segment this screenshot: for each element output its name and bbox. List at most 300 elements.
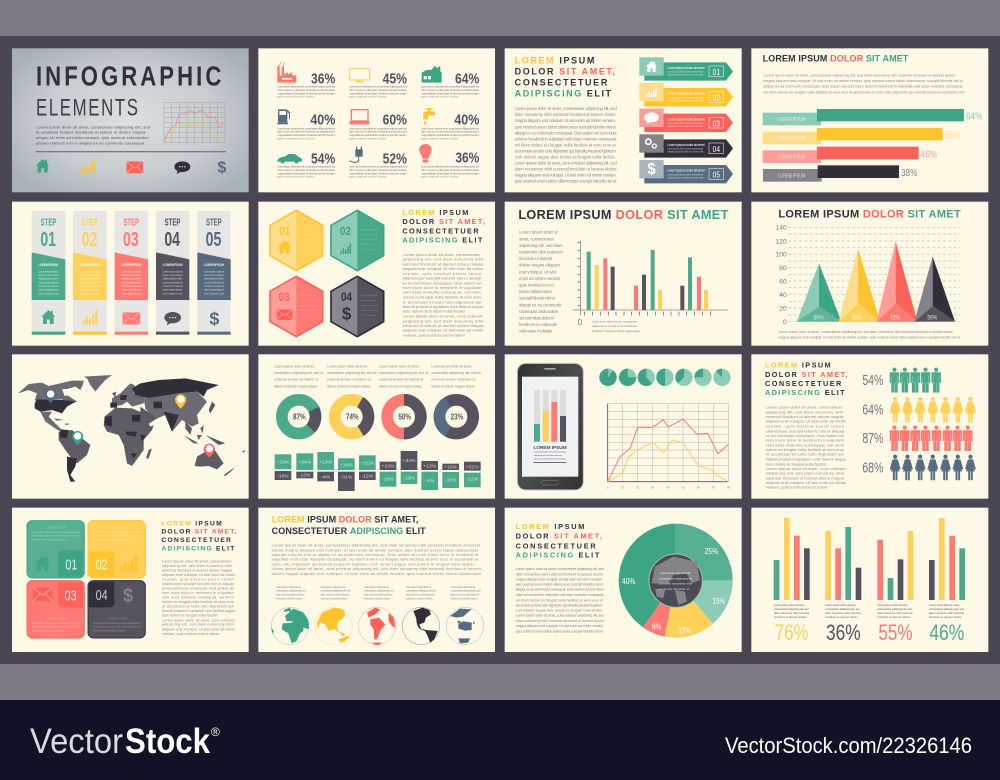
bar 55% xyxy=(763,128,961,144)
image id: VectorStock.com/22326146 xyxy=(725,733,972,758)
hexagon captions: adipiscing elit sed xyxy=(361,304,378,307)
body text: Lorem ipsum dolor sit amet, consectetuer xyxy=(766,405,843,410)
hexagon captions: nibh euismod xyxy=(361,315,378,317)
captions: Lorem ipsum dolor sit amet, consectetuer adipiscing elit, sed xyxy=(349,165,407,169)
column text: Lorem ipsum dolor sit amet, xyxy=(327,364,368,368)
tile 04: 04 xyxy=(96,588,108,604)
icon: bars xyxy=(81,159,95,173)
heading: CONSECTETUER xyxy=(161,537,231,544)
hexagon 04 xyxy=(331,276,384,337)
body text: ex ea commodo consequat. Duis autem vel xyxy=(162,587,234,591)
step 04: nonummy nibh euismod xyxy=(163,280,183,284)
icon: home xyxy=(36,159,49,172)
panel: phone and line chart xyxy=(505,354,742,499)
tile 04: laoreet dolore magna aliquam xyxy=(93,629,126,632)
heading xyxy=(516,522,602,560)
column text: consectetur adipiscing elit, sed do xyxy=(379,371,429,375)
globe captions: diam nonummy nibh euismod xyxy=(406,594,435,597)
percent 54: 54% xyxy=(311,151,335,167)
segment labels: 8% xyxy=(652,621,662,631)
centre globe: sed diam nonummy nibh xyxy=(659,582,693,586)
group 36%: consectetuer adipiscing elit, sed xyxy=(825,608,860,611)
centre globe: Lorem ipsum dolor sit amet xyxy=(660,571,691,575)
body text: veniam, quis nostrud exerci tation xyxy=(766,485,827,490)
panel: ring chart xyxy=(505,508,742,652)
hexagon 02 xyxy=(331,210,384,271)
centre globe: consectetuer adipiscing elit xyxy=(659,576,692,580)
group 36%: Lorem ipsum dolor sit amet, xyxy=(825,604,856,607)
step 04: tincidunt ut laoreet xyxy=(163,284,183,288)
step 05: nonummy nibh euismod xyxy=(204,280,225,284)
step 05: adipiscing elit sed diam xyxy=(204,277,225,281)
captions: Lorem ipsum dolor sit amet, consectetuer adipiscing elit, sed xyxy=(277,126,336,130)
icon: dollar: $ xyxy=(217,160,227,177)
step 01: 01 xyxy=(40,229,56,251)
body text: Lorem ipsum dolor sit amet, consectetuer adipiscing elit, sed diam nonummy nibh euismod tincidunt ut laoreet xyxy=(272,544,481,548)
side text: adipiscing elit, sed diam xyxy=(519,243,563,248)
captions: quis nostrud exerci tation xyxy=(277,136,315,140)
body text: aliquam erat volutpat. Ut wisi enim ad minim xyxy=(162,573,235,577)
logo: VectorStock: ® xyxy=(211,725,220,739)
heading: CONSECTETUER xyxy=(515,77,608,87)
captions: magna aliquam erat volutpat. Ut wisi enim ad minim veniam xyxy=(277,171,336,175)
body text: Lorem ipsum dolor sit amet, cons ectetuer adipiscing elit, sed xyxy=(515,161,617,166)
donut 87% xyxy=(276,394,321,439)
hexagon captions: sit amet consect xyxy=(300,299,317,302)
heading: ADIPISCING ELIT xyxy=(765,388,845,397)
step 05: amet consectetuer xyxy=(204,273,224,277)
donut 50% xyxy=(387,400,421,433)
body text: Lorem ipsum dolor sit amet, cons ectetuer adipiscing elit, sed xyxy=(516,614,604,618)
body text: euismod tincidunt ut laoreet dolore magna xyxy=(403,261,484,266)
bar 64%: LOREM IPSUM xyxy=(778,117,805,123)
body text: aliquip ex ea commodo consequat. Duis autem vel eum iriure dolor in hendrerit in vulputate velit esse molestie consequat, xyxy=(763,85,963,89)
percent 52: 52% xyxy=(383,151,407,167)
tile 03: 03 xyxy=(65,589,77,605)
globe red xyxy=(358,607,396,645)
column text: Lorem ipsum dolor sit amet, xyxy=(431,364,472,368)
step 05: dolore magna aliquam xyxy=(204,288,225,292)
percent labels xyxy=(862,373,883,476)
step 01: Lorem ipsum dolor sit xyxy=(38,269,59,273)
captions: magna aliquam erat volutpat. Ut wisi enim ad minim veniam xyxy=(349,133,407,137)
arrow 04 xyxy=(639,134,733,158)
arrow 02: adipiscing elit sed diam nonummy nibh xyxy=(667,99,704,102)
bar values: +34% xyxy=(403,458,416,464)
heading: DOLOR SIT AMET, xyxy=(515,66,615,76)
bar values: +31% xyxy=(466,464,479,470)
icon: envelope xyxy=(126,161,143,173)
captions: magna aliquam erat volutpat. Ut wisi enim ad minim veniam xyxy=(421,133,480,137)
globe captions: diam nonummy nibh euismod xyxy=(276,594,305,597)
logo: VectorStock: Vector xyxy=(30,722,123,761)
hexagon captions: Lorem ipsum dolor xyxy=(361,228,378,231)
centre globe: euismod tincidunt ut xyxy=(659,587,690,591)
y axis labels: 120 xyxy=(776,238,787,245)
green row xyxy=(890,367,941,393)
step 02: tincidunt ut laoreet xyxy=(80,284,100,288)
donut 87%: 87% xyxy=(293,412,306,421)
map xyxy=(18,375,245,482)
hexagon captions: Lorem ipsum dolor xyxy=(361,294,378,297)
globe captions: diam nonummy nibh euismod xyxy=(321,594,350,597)
column text: Lorem ipsum dolor sit amet, xyxy=(379,364,420,368)
captions: Lorem ipsum dolor sit amet, consectetuer adipiscing elit, sed xyxy=(349,126,407,130)
captions: magna aliquam erat volutpat. Ut wisi enim ad minim veniam xyxy=(349,171,407,175)
footer band xyxy=(0,700,1000,780)
chart axis labels: 80 xyxy=(727,485,731,489)
globe captions: tincidunt ut laoreet dolore xyxy=(276,597,303,600)
percent labels: 54% xyxy=(862,373,883,389)
tile 04: $ xyxy=(123,586,133,607)
arrow 03: Lorem ipsum dolor sit amet consectetuer xyxy=(667,122,704,125)
body text: dolore eu feugiat nulla facilisis at vero eros xyxy=(766,447,844,452)
arrow 05: $ xyxy=(647,161,656,178)
column text: eiusmod tempor incididunt ut xyxy=(379,378,423,382)
side text: velit esse molestie xyxy=(519,329,553,334)
panel: people pictograms xyxy=(751,354,988,499)
percent 36: 36% xyxy=(311,71,335,87)
hexagon captions: diam nonummy xyxy=(300,244,317,246)
bar 64% xyxy=(763,109,982,125)
column text: labore et dolore magna aliqua. xyxy=(379,384,423,388)
tile 03: elit sed diam nonummy nibh euismod tincidunt ut xyxy=(32,626,81,629)
body text: eum iriure dolor in hendrerit in vulputate xyxy=(162,591,234,595)
arrow 02 xyxy=(639,83,733,106)
body text: eum iriure dolor in hendrerit in vulputate xyxy=(403,285,482,290)
captions: Lorem ipsum dolor sit amet, consectetuer adipiscing elit, sed xyxy=(349,85,407,89)
body text: dolore eu feugiat nulla facilisis at vero eros xyxy=(403,295,481,300)
body text: et accumsan et iusto odio dignissim qui xyxy=(766,452,844,457)
body text: et accumsan et iusto odio dignissim qui xyxy=(162,605,234,609)
captions: magna aliquam erat volutpat. Ut wisi enim ad minim veniam xyxy=(277,91,336,95)
captions: magna aliquam erat volutpat. Ut wisi enim ad minim veniam xyxy=(421,171,480,175)
body text: euismod tincidunt ut laoreet dolore magna xyxy=(766,414,844,419)
chart axis labels: 20 xyxy=(636,485,640,489)
tile 02: Lorem ipsum dolor sit amet, consectetuer adipiscing xyxy=(93,531,142,534)
body text: quis nostrud exerci tation ullamcorper suscipit lobortis nisl ut xyxy=(516,629,603,633)
step 03: STEP xyxy=(123,218,139,229)
hexagon 01 xyxy=(270,210,323,271)
chart axis labels: 30 xyxy=(651,485,655,489)
group 55%: diam nonummy nibh euismod xyxy=(877,612,913,615)
step 05: STEP xyxy=(206,218,222,229)
tile 04: Lorem ipsum dolor sit amet, consectetuer adipiscing xyxy=(93,622,142,625)
arrow 01: Lorem ipsum dolor sit amet consectetuer xyxy=(667,71,704,74)
captions: diam nonummy nibh euismod tincidunt ut laoreet dolore xyxy=(277,130,336,134)
hexagon captions: nibh euismod xyxy=(300,249,317,251)
icon: faucet xyxy=(423,108,435,124)
group 55% xyxy=(877,531,913,645)
captions: diam nonummy nibh euismod tincidunt ut laoreet dolore xyxy=(349,168,407,172)
body text: adipiscing elit, sed diam nonummy nibh xyxy=(766,409,843,414)
heading: CONSECTETUER xyxy=(765,379,842,388)
step 02: adipiscing elit sed diam xyxy=(80,277,100,281)
donut 74% xyxy=(329,394,375,440)
triangle 56%: 56% xyxy=(927,315,938,321)
bar values: +13% xyxy=(423,463,437,469)
step 04: Lorem ipsum dolor sit xyxy=(163,269,183,273)
heading: ADIPISCING ELIT xyxy=(161,545,234,552)
percent labels: 64% xyxy=(862,403,883,419)
columns xyxy=(587,250,708,310)
body text: accumsan et iusto odio dignissim qui blandit praesent luptatum xyxy=(516,603,603,607)
body text: blandit praesent luptatum zzril delenit augue xyxy=(766,456,847,461)
panel: donuts and diverging bars xyxy=(258,354,495,499)
body text: quis nostrud exerci tation ullamcorper suscipit lobortis nisl ut xyxy=(515,179,617,184)
side text: nonummy nibh euismod xyxy=(519,250,563,255)
bar values: -16% xyxy=(382,477,394,483)
bar values: -12% xyxy=(467,476,479,482)
icon: car xyxy=(277,154,302,163)
globe captions: diam nonummy nibh euismod xyxy=(451,594,480,597)
tile 02 xyxy=(88,521,145,578)
step 01: erat volutpat ut wisi xyxy=(38,291,59,295)
chart axis labels: 70 xyxy=(712,485,715,489)
captions: quis nostrud exerci tation xyxy=(421,95,459,99)
step 02: nonummy nibh euismod xyxy=(80,280,100,284)
percent labels: 87% xyxy=(862,431,883,447)
icon: factory xyxy=(277,62,296,83)
bar 38%: 38% xyxy=(901,168,917,179)
captions: quis nostrud exerci tation xyxy=(421,175,459,179)
group 76% xyxy=(774,518,810,645)
body text: zzril delenit augue duis dolore te feugait nulla facilisi. xyxy=(516,609,603,613)
tile 02: 02 xyxy=(96,557,108,573)
captions: quis nostrud exerci tation xyxy=(349,136,387,140)
body text: aliquam erat volutpat. Ut wisi enim ad minim xyxy=(766,480,847,485)
heading: LOREM IPSUM DOLOR SIT AMET xyxy=(763,54,909,64)
caption: Lorem ipsum dolor sit amet, consectetuer adipiscing elit, sed diam nonummy nibh euismod tincidunt ut laoreet dolore xyxy=(778,330,953,334)
triangle 50% xyxy=(797,263,841,322)
captions: diam nonummy nibh euismod tincidunt ut laoreet dolore xyxy=(421,168,480,172)
intro text: do eiusmod tempor incididunt ut labore et dolore magna xyxy=(36,131,146,135)
group 76%: tincidunt ut laoreet dolore xyxy=(774,616,807,619)
chart axis labels: 50 xyxy=(682,485,685,489)
column text: consectetur adipiscing elit, sed do xyxy=(274,371,324,375)
bar 55%: LOREM IPSUM xyxy=(778,136,805,142)
step 04: adipiscing elit sed diam xyxy=(163,277,183,281)
heading: LOREM IPSUM xyxy=(161,520,222,527)
group 55%: tincidunt ut laoreet dolore xyxy=(877,616,911,619)
side text: tincidunt ut laoreet xyxy=(519,256,553,261)
globe captions: consectetuer adipiscing elit, sed xyxy=(451,590,481,593)
captions: Lorem ipsum dolor sit amet, consectetuer adipiscing elit, sed xyxy=(421,126,480,130)
side text: Lorem ipsum dolor sit xyxy=(519,230,559,235)
heading: ADIPISCING ELIT xyxy=(515,88,611,98)
pin green xyxy=(72,431,83,445)
hexagon 04: $ xyxy=(342,303,352,323)
column text xyxy=(274,364,481,388)
chart axis labels xyxy=(607,485,731,489)
bar values: -12% xyxy=(362,473,374,479)
top band xyxy=(0,0,1000,36)
intro text: aliqua. Ut enim ad minim veniam, quis nostrud exercitation xyxy=(36,136,149,140)
step 03: 03 xyxy=(123,229,139,251)
arrow 04: Lorem ipsum dolor sit amet consectetuer xyxy=(667,148,704,151)
arrow 02: 02 xyxy=(713,93,720,103)
step 02: Lorem ipsum dolor sit xyxy=(80,269,100,273)
captions: diam nonummy nibh euismod tincidunt ut laoreet dolore xyxy=(421,130,480,134)
captions: quis nostrud exerci tation xyxy=(421,136,459,140)
donut 74%: 74% xyxy=(346,412,359,421)
globe yellow xyxy=(315,607,352,645)
y axis labels: 40 xyxy=(779,292,787,299)
body text: aliquam erat volutpat. Ut wisi enim ad minim xyxy=(162,627,235,631)
captions: diam nonummy nibh euismod tincidunt ut laoreet dolore xyxy=(277,88,336,92)
body text: adipiscing elit, sed diam nonummy nibh xyxy=(403,257,483,262)
group 46%: diam nonummy nibh euismod xyxy=(929,612,965,615)
bar 46%: LOREM IPSUM xyxy=(778,155,805,161)
group 46%: consectetuer adipiscing elit, sed xyxy=(929,608,964,611)
body text: Lorem ipsum dolor sit amet, cons ectetuer xyxy=(766,466,847,471)
heading xyxy=(765,361,848,397)
step 01: STEP xyxy=(41,218,57,229)
body text: magna aliquam erat volutpat. Ut wisi enim ad minim veniam, xyxy=(515,118,616,123)
segment labels xyxy=(622,546,725,635)
step 04: erat volutpat ut wisi xyxy=(163,291,183,295)
axes xyxy=(573,241,728,315)
arrow 05: Lorem ipsum dolor sit amet consectetuer xyxy=(667,173,704,176)
heading: DOLOR SIT AMET, xyxy=(516,532,602,541)
body text: Lorem ipsum dolor sit amet, consectetuer adipiscing elit, sed xyxy=(515,106,617,111)
segment labels: 15% xyxy=(713,596,725,606)
hexagon captions: sit amet consect xyxy=(300,233,317,236)
line chart xyxy=(608,419,729,482)
group 46%: 46% xyxy=(929,620,964,645)
chart axis labels: 0 xyxy=(607,485,609,489)
panel: horizontal bars xyxy=(751,48,988,192)
heading: DOLOR SIT AMET, xyxy=(765,370,848,379)
pie segments xyxy=(619,524,733,638)
body text: accumsan et iusto odio dignissim qui blandit praesent luptatum xyxy=(515,148,616,153)
bar values: -4% xyxy=(425,478,435,484)
group 55%: 55% xyxy=(878,620,913,645)
body text: Lorem ipsum dolor sit amet, consectetuer xyxy=(403,252,481,257)
globe captions: Lorem ipsum dolor sit amet, xyxy=(364,586,389,589)
phone: LOREM IPSUM xyxy=(533,445,567,451)
globe captions: Lorem ipsum dolor sit amet, xyxy=(276,586,301,589)
hexagon captions: Lorem ipsum dolor xyxy=(300,294,317,297)
step 02: amet consectetuer xyxy=(80,273,100,277)
triangle 72%: 72% xyxy=(890,315,901,321)
step 02: dolore magna aliquam xyxy=(80,288,100,292)
body text: aliquip ex ea commodo consequat. Duis autem vel eum iriure xyxy=(515,130,618,135)
arrow 02: Lorem ipsum dolor sit amet consectetuer xyxy=(667,96,704,99)
bar values: +31% xyxy=(361,461,374,467)
arrow 03: adipiscing elit sed diam nonummy nibh xyxy=(667,125,704,128)
icon: plug xyxy=(349,147,363,162)
arrow 04: adipiscing elit sed diam nonummy nibh xyxy=(667,151,704,154)
y axis labels xyxy=(776,225,787,326)
phone: nibh euismod tincidunt ut laoreet dolore xyxy=(534,458,567,461)
group 55%: consectetuer adipiscing elit, sed xyxy=(877,608,912,611)
tile 04: elit sed diam nonummy nibh euismod tincidunt ut xyxy=(93,626,141,629)
globe captions: consectetuer adipiscing elit, sed xyxy=(321,590,351,593)
hexagon captions: adipiscing elit sed xyxy=(361,238,378,241)
hexagon 04: 04 xyxy=(341,290,352,304)
bar values: -31% xyxy=(341,474,353,480)
tile 03 xyxy=(27,581,84,638)
step 03: LOREM IPSUM xyxy=(121,263,142,267)
chart caption: Lorem ipsum dolor sit amet, consectetuer xyxy=(592,320,637,324)
column text: eiusmod tempor incididunt ut xyxy=(274,378,318,382)
globe captions: consectetuer adipiscing elit, sed xyxy=(276,590,307,593)
column text: eiusmod tempor incididunt ut xyxy=(327,378,371,382)
centre globe xyxy=(649,554,702,607)
bar values: -4% xyxy=(321,474,331,480)
column text: labore et dolore magna aliqua. xyxy=(274,384,318,388)
hexagon captions: adipiscing elit sed xyxy=(300,304,317,307)
bar values: +23% xyxy=(382,464,395,470)
group 36%: tincidunt ut laoreet dolore xyxy=(825,616,859,619)
bar 38%: LOREM IPSUM xyxy=(778,173,805,179)
step 02: erat volutpat ut wisi xyxy=(80,291,100,295)
body text: velit esse molestie consequat, vel illum xyxy=(766,442,845,447)
panel: arrow list xyxy=(505,48,742,192)
body text: veniam, quis nostrud exerci tation xyxy=(403,332,465,337)
body text: magna aliquam erat volutpat. Ut wisi enim ad minim veniam, xyxy=(515,173,617,178)
step 05: $ xyxy=(209,309,220,329)
globe captions: Lorem ipsum dolor sit amet, xyxy=(451,586,476,589)
arrow 05: Lorem ipsum dolor sit amet xyxy=(667,169,705,173)
captions: Lorem ipsum dolor sit amet, consectetuer adipiscing elit, sed xyxy=(277,85,336,89)
captions: quis nostrud exerci tation xyxy=(349,95,387,99)
group 36%: diam nonummy nibh euismod xyxy=(825,612,861,615)
step 01: nonummy nibh euismod xyxy=(38,280,59,284)
body text: ullamcorper suscipit lobortis nisl ut aliquip xyxy=(766,428,845,433)
arrow 04: 04 xyxy=(713,144,720,154)
bar values: +19% xyxy=(340,462,353,468)
arrow 03: Lorem ipsum dolor sit amet xyxy=(667,117,705,121)
chart axis labels: 40 xyxy=(667,485,670,489)
subtitle: elements: ELEMENTS xyxy=(36,95,138,121)
tile 03: LOREM IPSUM xyxy=(47,618,66,620)
side text: amet, consectetuer xyxy=(519,236,555,241)
heading: DOLOR SIT AMET, xyxy=(402,217,485,226)
y axis labels: 0 xyxy=(783,319,787,326)
triangle 50%: 50% xyxy=(814,315,824,321)
side text: dolore magna aliquam xyxy=(519,263,560,268)
panel: numbered steps xyxy=(12,202,249,346)
panel: globes xyxy=(258,508,495,652)
percent 64: 64% xyxy=(455,71,479,87)
axis zero: 0 xyxy=(578,317,582,327)
tile 01 xyxy=(27,521,84,578)
bar values: -13% xyxy=(403,475,415,481)
bar values: -13% xyxy=(299,473,311,479)
heading: ADIPISCING ELIT xyxy=(516,551,600,560)
percent labels: 68% xyxy=(862,460,883,476)
tile 02: elit sed diam nonummy nibh euismod tincidunt ut xyxy=(93,535,141,538)
icon: fuel pump xyxy=(277,109,290,124)
hexagon captions: nibh euismod xyxy=(300,315,317,317)
percent 36 b: 36% xyxy=(455,151,479,167)
hexagon captions: Lorem ipsum dolor xyxy=(300,228,317,231)
tile 04 xyxy=(88,581,145,638)
hexagon captions: diam nonummy xyxy=(300,310,317,312)
axis ticks xyxy=(577,243,710,316)
captions: quis nostrud exerci tation xyxy=(349,175,387,179)
globe captions: consectetuer adipiscing elit, sed xyxy=(364,590,395,593)
heading: LOREM IPSUM DOLOR SIT AMET xyxy=(518,208,729,222)
phone xyxy=(517,363,583,490)
intro text: Lorem ipsum dolor sit amet, consectetur adipiscing elit, sed xyxy=(36,125,150,129)
step 05: Lorem ipsum dolor sit xyxy=(204,269,224,273)
body text: aliquam erat volutpat. Ut wisi enim ad minim xyxy=(403,266,484,271)
hexagon captions: sit amet consect xyxy=(361,299,378,302)
globe captions: diam nonummy nibh euismod xyxy=(364,594,393,597)
